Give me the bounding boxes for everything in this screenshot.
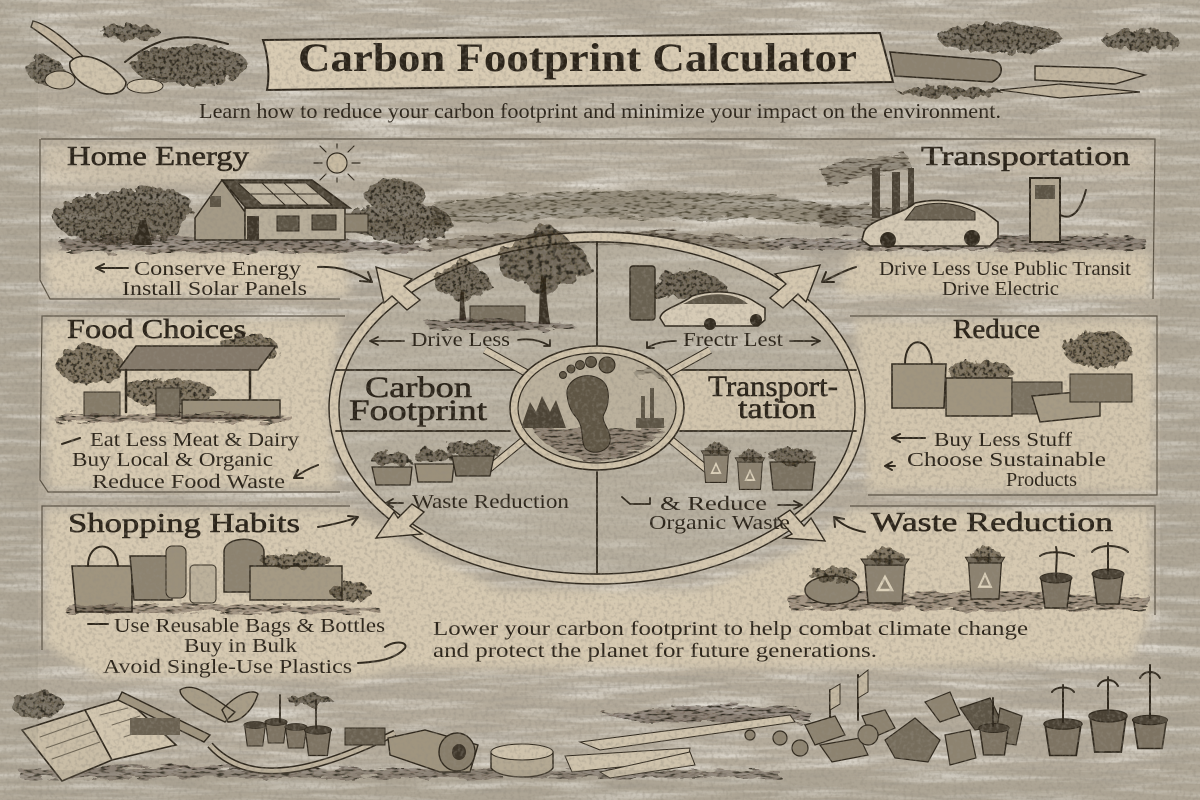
- text: shopping tips: Avoid Single-Use Plastics: [103, 656, 352, 678]
- text: home energy tips: Conserve Energy: [134, 258, 301, 280]
- text: food tips: Buy Local & Organic: [72, 449, 273, 471]
- text: shopping tips: Buy in Bulk: [184, 635, 297, 657]
- text: shopping tips: Use Reusable Bags & Bottles: [114, 615, 385, 637]
- wheel bottom-left planters: [370, 441, 502, 485]
- text: shopping tips: [103, 615, 385, 678]
- wheel labels: Organic Waste: [649, 512, 790, 534]
- text: food tips: Reduce Food Waste: [92, 471, 285, 493]
- wheel top-left trees: [425, 227, 589, 330]
- text: home energy tips: [122, 258, 307, 300]
- wheel labels: Waste Reduction: [412, 491, 569, 513]
- text: home energy tips: Install Solar Panels: [122, 278, 307, 300]
- wheel text: transportation: Transport-: [708, 370, 838, 403]
- wheel text: transportation: [708, 370, 838, 425]
- heading: waste reduction: Waste Reduction: [871, 507, 1114, 537]
- wheel middle bands: [675, 370, 860, 431]
- arrow heads: [376, 267, 420, 310]
- wheel ring: [334, 237, 860, 579]
- title: Carbon Footprint Calculator: [298, 35, 857, 80]
- illustration: header right tools: [890, 23, 1178, 98]
- wheel small arrows: [370, 337, 820, 509]
- icon: footprint: [560, 356, 615, 452]
- wheel bottom-right bins: [701, 444, 816, 490]
- wheel text: carbon footprint: Carbon: [365, 371, 472, 404]
- illustration: food market stall: [55, 334, 292, 422]
- text: reduce tips: Choose Sustainable: [907, 449, 1106, 471]
- text: food tips: [72, 429, 299, 493]
- wheel top-right car: [630, 266, 765, 330]
- illustration: stones, signposts and seedlings: [745, 665, 1168, 765]
- text: closing message: [433, 618, 1028, 662]
- text: closing message: Lower your carbon footprint to help combat climate change: [433, 618, 1028, 640]
- text: food tips: Eat Less Meat & Dairy: [90, 429, 299, 451]
- wheel dividers: [336, 242, 856, 574]
- heading: food choices: Food Choices: [67, 314, 246, 344]
- illustration: reduce market goods: [892, 332, 1132, 422]
- wheel text: carbon footprint: Footprint: [349, 394, 488, 427]
- panel: home energy and transportation band: [40, 139, 1155, 299]
- panel: shopping habits and waste reduction band: [42, 506, 1155, 678]
- wheel text: carbon footprint: [349, 371, 488, 427]
- text: transportation tips: Drive Electric: [942, 278, 1059, 300]
- wheel disc: [334, 237, 860, 579]
- arrows: panel pointers: [62, 264, 925, 663]
- icon: sun: [314, 144, 360, 182]
- text: reduce tips: [907, 429, 1106, 491]
- illustration: factories, car and charger: [820, 152, 1086, 248]
- wheel diagonal spokes: [485, 350, 710, 472]
- illustration: book, tools and tape measure: [12, 687, 810, 781]
- text: transportation tips: Drive Less Use Public Transit: [879, 258, 1131, 280]
- landscape hills: [60, 191, 1145, 252]
- heading: reduce: Reduce: [953, 314, 1040, 344]
- text: transportation tips: [879, 258, 1131, 300]
- subtitle: Learn how to reduce your carbon footprint and minimize your impact on the environment.: [199, 99, 1001, 123]
- text: closing message: and protect the planet for future generations.: [433, 640, 877, 662]
- heading: shopping habits: Shopping Habits: [68, 508, 300, 538]
- illustration: home, solar panels and tree: [54, 179, 452, 245]
- text: reduce tips: Products: [1006, 469, 1077, 491]
- heading: home energy: Home Energy: [67, 141, 250, 171]
- wheel: carbon footprint: [329, 227, 865, 584]
- illustration: header trowel and vines: [27, 21, 248, 94]
- illustration: recycling bins and seedlings: [790, 543, 1150, 610]
- wheel labels: Frectr Lest: [683, 329, 784, 351]
- banner title: [263, 33, 893, 90]
- wheel labels: [411, 329, 790, 534]
- wheel labels: & Reduce: [660, 493, 767, 515]
- panel: reduce: [850, 316, 1157, 495]
- panel: food choices: [40, 316, 345, 492]
- wheel text: transportation: tation: [738, 392, 816, 425]
- wheel labels: Drive Less: [411, 329, 510, 351]
- heading: transportation: Transportation: [921, 141, 1131, 171]
- wheel ring edges: [329, 232, 865, 584]
- center medallion: [510, 346, 684, 470]
- illustration: reusable bags and jars: [66, 539, 380, 613]
- text: reduce tips: Buy Less Stuff: [934, 429, 1072, 451]
